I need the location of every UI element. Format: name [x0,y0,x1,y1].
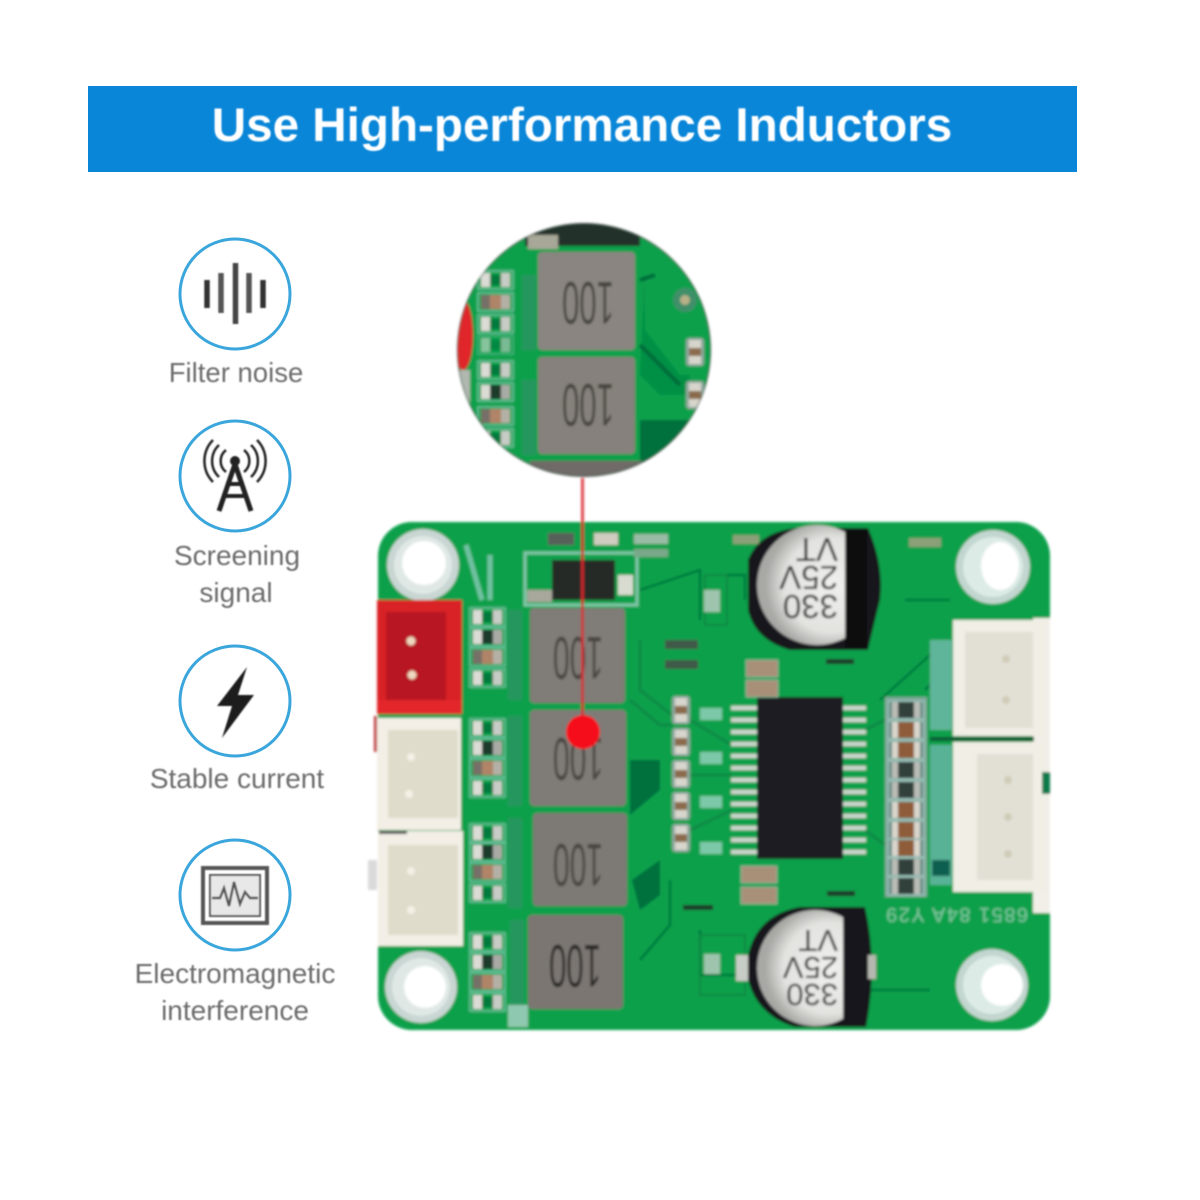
capacitor: bottom: 25V [783,950,838,985]
right resistor column [885,640,952,897]
pointer line and red dot [566,478,600,749]
title banner [88,86,1077,172]
left white connectors [368,718,463,946]
mounting holes [385,529,1030,1023]
feature: screening signal [174,421,300,608]
inductors [528,608,627,1009]
label: screening signal: signal [199,577,273,608]
feature: stable current [150,646,324,794]
label: electromagnetic interference [135,958,335,1026]
icon: oscilloscope [180,840,290,950]
inductors: 100 [553,830,603,897]
board base [378,522,1050,1030]
feature: electromagnetic interference [135,840,335,1026]
capacitor: bottom: 330 [786,977,838,1012]
right white connectors [930,618,1050,913]
icon: signal tower [180,421,290,531]
capacitor: top: 330 [783,588,838,625]
capacitor: top [748,525,881,650]
board silkscreen code: 6851 84A Y29 [885,903,1028,925]
feature: filter noise [169,239,303,388]
circuit board [368,222,1050,1030]
title text: Use High-performance Inductors [212,99,952,152]
chip [731,697,866,859]
label: screening signal [174,540,300,608]
traces [630,570,952,995]
inductors: 100 [549,931,601,998]
capacitor: bottom: VT [798,923,838,958]
icon: lightning bolt [180,646,290,756]
label: electromagnetic interference: Electromagnetic [135,958,335,989]
magnified inductor lens: 100 [562,370,614,437]
capacitor: top: VT [796,531,838,568]
inductors: 100 [553,623,603,690]
label: stable current: Stable current [150,763,324,794]
capacitor: bottom [736,907,876,1027]
centre small components [665,535,941,910]
left small components [466,545,528,1027]
red power connector [374,600,462,752]
magnified inductor lens: 100 [562,268,614,335]
label: electromagnetic interference: interference [161,995,309,1026]
label: screening signal: Screening [174,540,300,571]
capacitor: top: 25V [779,559,838,596]
inductors: 100 [553,724,603,791]
icon: sound wave [180,239,290,349]
magnified inductor lens [453,222,716,481]
top diode [525,533,668,605]
label: filter noise: Filter noise [169,357,303,388]
